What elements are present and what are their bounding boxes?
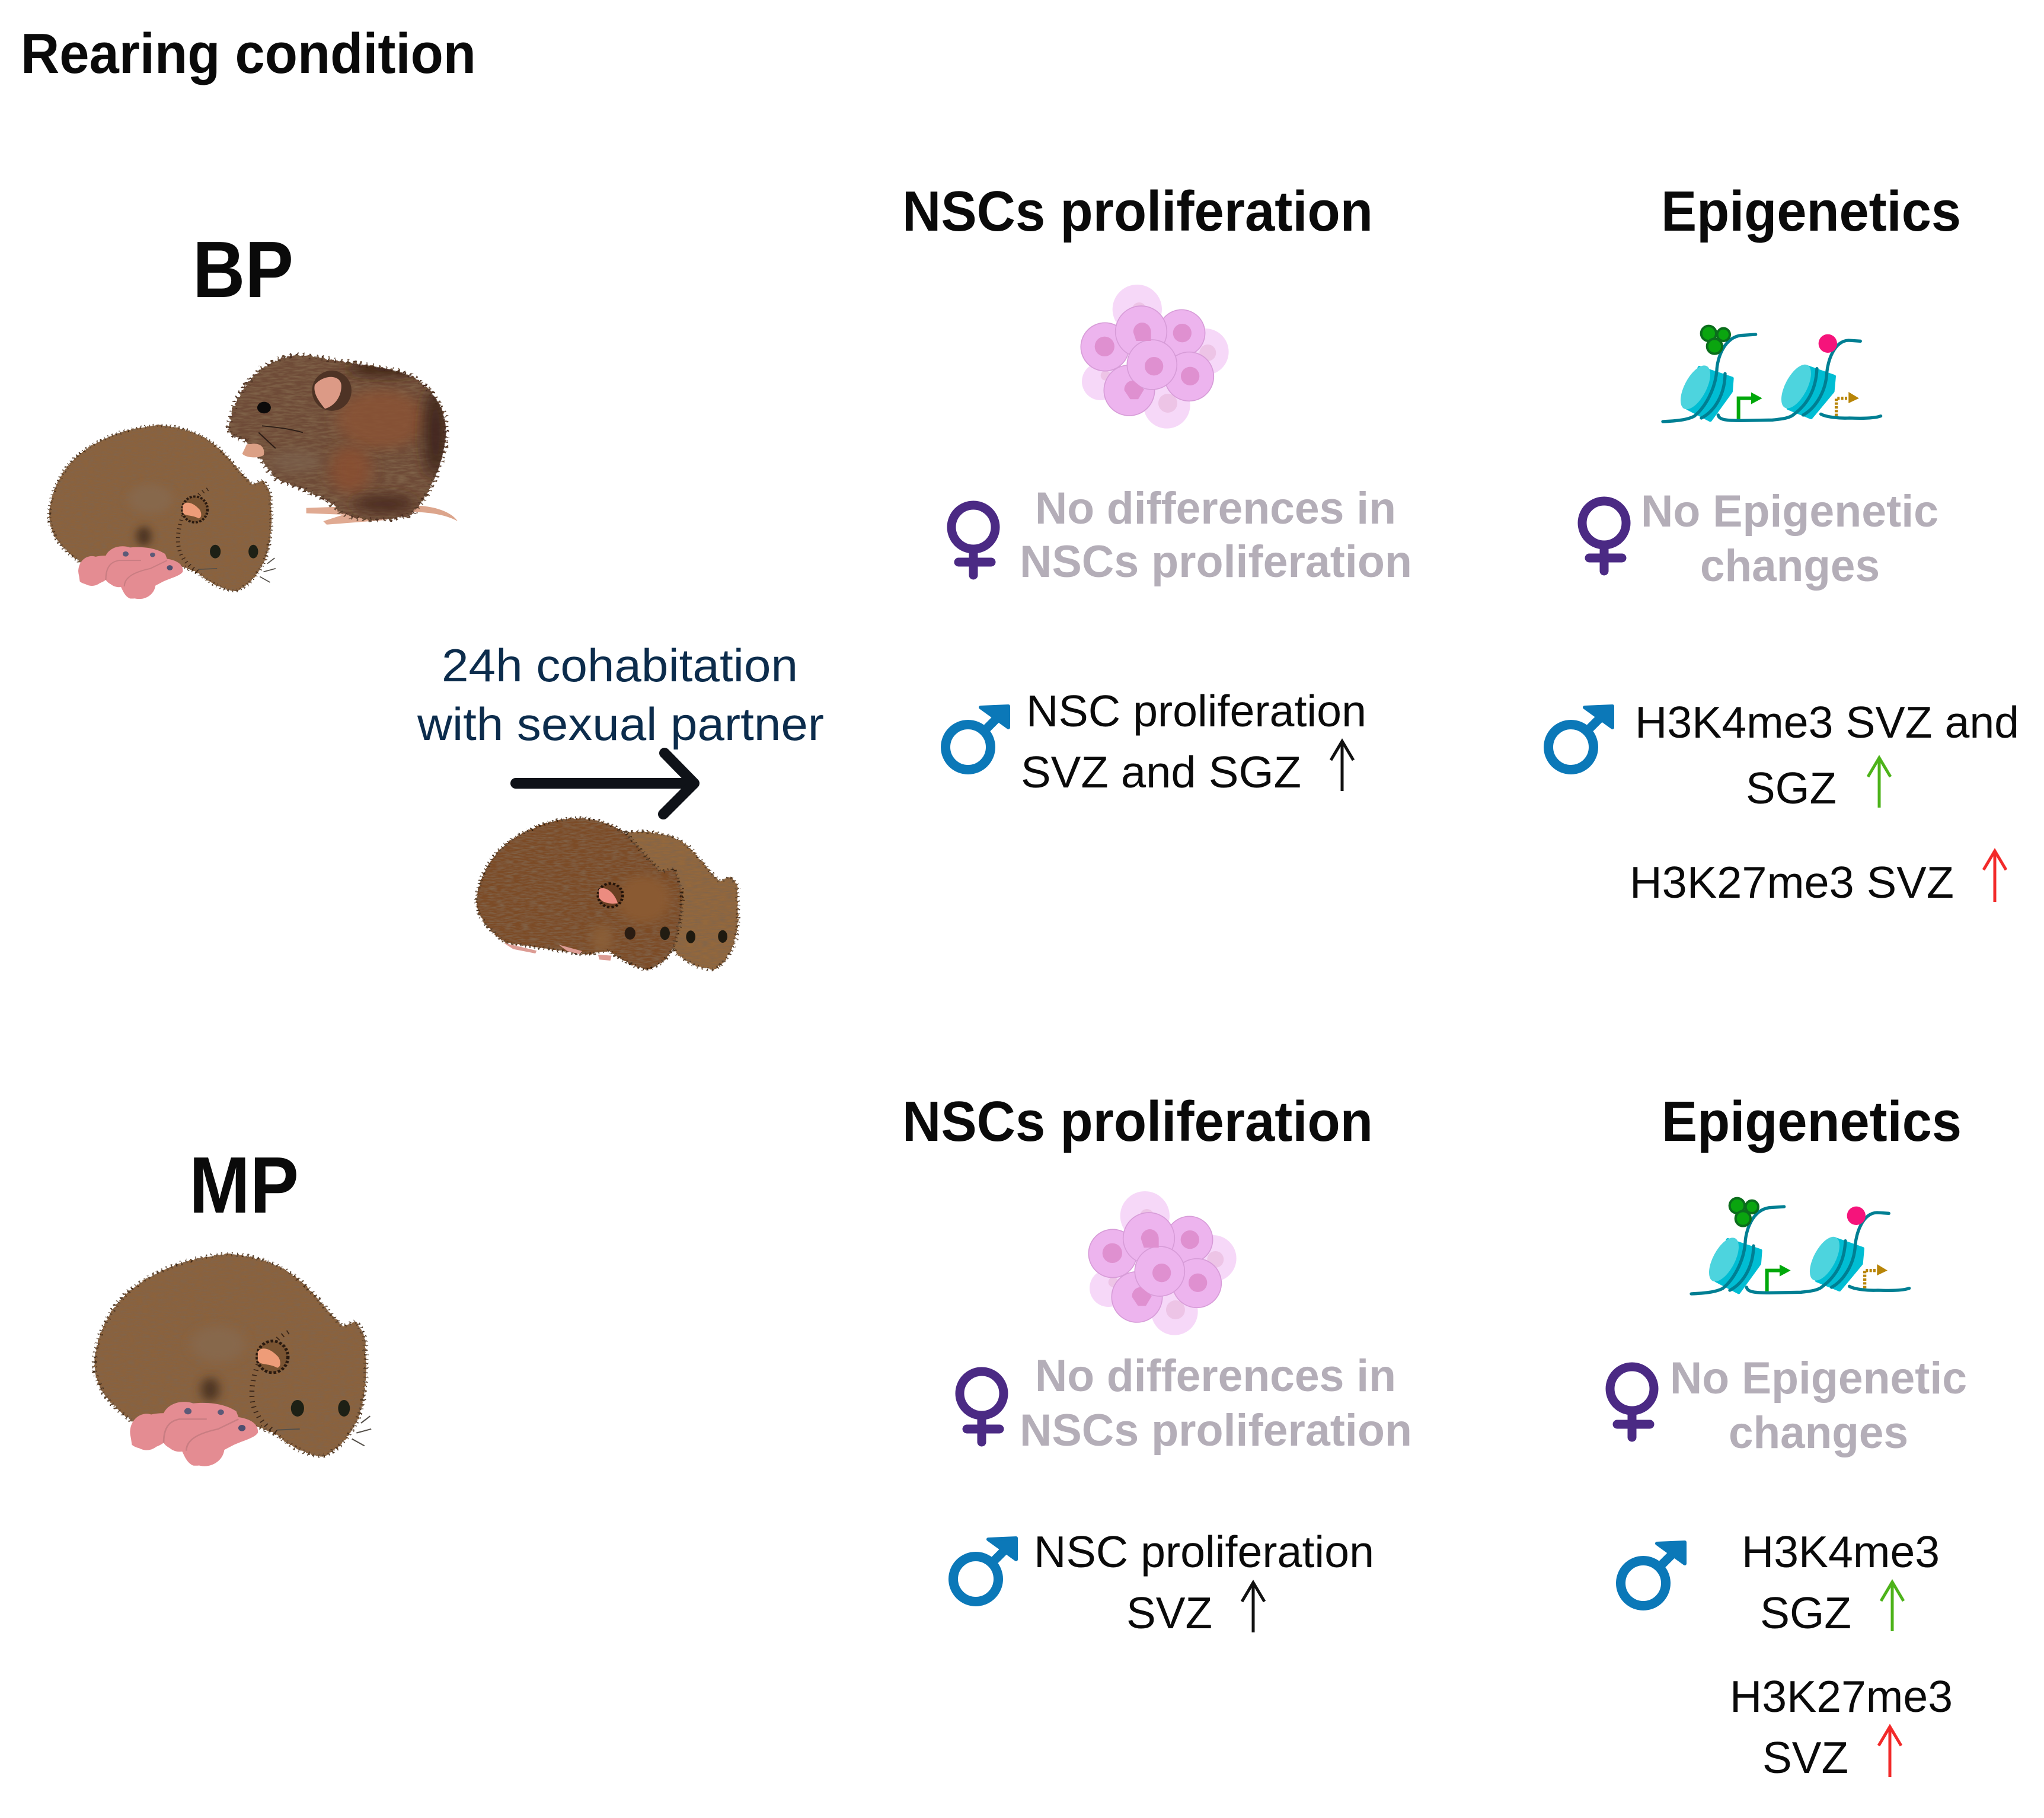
text: no differences in female NSC proliferation xyxy=(1020,1351,1412,1456)
arrow: up black xyxy=(1331,741,1353,791)
text: H3K4me3 SVZ and SGZ: H3K4me3 SVZ and xyxy=(1635,697,2019,747)
title: Rearing condition: Rearing condition xyxy=(21,22,476,85)
text: male NSC proliferation SVZ: NSC proliferation xyxy=(1034,1527,1374,1577)
text: H3K4me3 SVZ and SGZ: SGZ xyxy=(1746,763,1837,813)
panel: BP Epigenetics xyxy=(1548,180,2019,907)
text: no epigenetic changes in females xyxy=(1670,1353,1967,1458)
text: H3K27me3 SVZ: SVZ xyxy=(1762,1733,1848,1782)
text: no epigenetic changes in females: changes xyxy=(1729,1408,1908,1458)
panel: BP rearing condition xyxy=(49,225,458,599)
text: male NSC proliferation SVZ and SGZ: SVZ and SGZ xyxy=(1021,747,1301,797)
text: male NSC proliferation SVZ: SVZ xyxy=(1126,1588,1212,1638)
female symbol xyxy=(1582,501,1626,571)
arrow: up red xyxy=(1984,851,2006,902)
female symbol xyxy=(960,1372,1004,1442)
heading: BP: BP xyxy=(193,225,293,314)
text: male NSC proliferation SVZ and SGZ: NSC proliferation xyxy=(1026,686,1366,736)
panel: BP NSCs proliferation xyxy=(902,180,1412,797)
text: H3K4me3 SGZ xyxy=(1742,1527,1940,1638)
text: H3K27me3 SVZ xyxy=(1730,1672,1953,1782)
illustration: mother vole with pups xyxy=(49,425,276,599)
arrow: to cohabitation xyxy=(516,753,694,814)
heading: NSCs proliferation: NSCs proliferation xyxy=(902,180,1373,243)
text: no differences in female NSC proliferation xyxy=(1020,483,1412,587)
heading: MP: MP xyxy=(189,1140,299,1230)
text: male NSC proliferation SVZ and SGZ xyxy=(1021,686,1366,797)
text: no epigenetic changes in females xyxy=(1641,486,1938,591)
arrow: up black xyxy=(1242,1583,1264,1632)
heading: Epigenetics: Epigenetics xyxy=(1662,1090,1962,1153)
text: no epigenetic changes in females: No Epigenetic xyxy=(1641,486,1938,537)
heading: Epigenetics: Epigenetics xyxy=(1661,180,1961,243)
icon: neural stem cell cluster xyxy=(1088,1191,1237,1335)
male symbol xyxy=(1621,1542,1685,1606)
text: no differences in female NSC proliferation: No differences in xyxy=(1035,1351,1396,1401)
text: H3K4me3 SGZ: SGZ xyxy=(1760,1588,1851,1638)
panel: MP NSCs proliferation xyxy=(902,1090,1412,1638)
illustration: mother vole with pups xyxy=(94,1254,371,1466)
arrow: up green xyxy=(1868,758,1890,808)
callout: 24h cohabitation with sexual partner xyxy=(417,639,824,750)
text: H3K4me3 SGZ: H3K4me3 xyxy=(1742,1527,1940,1577)
male symbol xyxy=(1548,706,1612,770)
callout: 24h cohabitation with sexual partner: with sexual partner xyxy=(417,698,824,750)
text: H3K27me3 SVZ: H3K27me3 SVZ xyxy=(1630,857,1954,907)
female symbol xyxy=(1610,1367,1654,1437)
icon: nucleosomes with histone marks xyxy=(1691,1198,1909,1294)
text: H3K4me3 SVZ and SGZ xyxy=(1635,697,2019,813)
arrow: up green xyxy=(1881,1582,1904,1631)
panel: MP rearing condition xyxy=(94,1140,371,1466)
callout: 24h cohabitation with sexual partner: 24h cohabitation xyxy=(442,639,798,691)
male symbol xyxy=(946,706,1008,770)
icon: nucleosomes with histone marks xyxy=(1663,326,1881,422)
illustration: male vole standing xyxy=(229,355,458,525)
text: no epigenetic changes in females: No Epigenetic xyxy=(1670,1353,1967,1404)
text: no differences in female NSC proliferation: NSCs proliferation xyxy=(1020,537,1412,587)
heading: NSCs proliferation: NSCs proliferation xyxy=(902,1090,1373,1153)
text: no differences in female NSC proliferation: NSCs proliferation xyxy=(1020,1405,1412,1456)
text: male NSC proliferation SVZ xyxy=(1034,1527,1374,1638)
icon: neural stem cell cluster xyxy=(1081,285,1229,429)
text: H3K27me3 SVZ: H3K27me3 xyxy=(1730,1672,1953,1721)
panel: MP Epigenetics xyxy=(1610,1090,1967,1782)
text: no differences in female NSC proliferation: No differences in xyxy=(1035,483,1396,534)
text: no epigenetic changes in females: changes xyxy=(1700,541,1880,591)
illustration: cohabiting vole pair xyxy=(477,818,738,969)
arrow: up red xyxy=(1879,1727,1901,1777)
female symbol xyxy=(951,505,995,575)
male symbol xyxy=(953,1538,1016,1602)
